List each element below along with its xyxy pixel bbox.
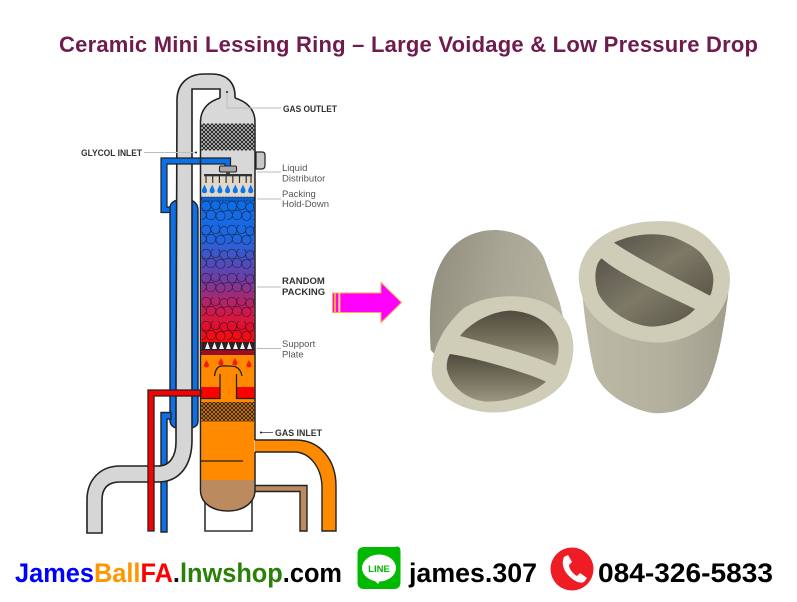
packing hold-down xyxy=(201,197,254,201)
small dots xyxy=(195,91,262,434)
brown drain pipe xyxy=(250,486,307,531)
footer: website: JamesBallFA.lnwshop.com xyxy=(15,558,342,588)
label: gas outlet: GAS OUTLET xyxy=(283,104,337,115)
icon: phone xyxy=(550,548,594,590)
label: liquid distributor: Liquid xyxy=(282,163,307,174)
label: support plate: Plate xyxy=(282,350,304,360)
column outline xyxy=(200,98,255,511)
footer: phone number: 084-326-5833 xyxy=(598,558,773,588)
side nozzle xyxy=(256,152,265,169)
stand under column xyxy=(205,500,252,531)
footer: line id: james.307 xyxy=(408,558,537,588)
label: random packing: PACKING xyxy=(282,287,325,298)
label: packing hold-down: Hold-Down xyxy=(282,199,329,210)
ring: left ceramic mini lessing ring xyxy=(430,230,573,412)
gray vapor pipe xyxy=(87,74,235,533)
top mesh pad xyxy=(201,124,254,150)
baffle xyxy=(201,460,243,462)
diagram: absorption column xyxy=(87,74,336,533)
blue lower pipe xyxy=(161,412,171,532)
red outlet pipe xyxy=(148,390,201,531)
liquid distributor xyxy=(204,166,252,183)
red liquid tray xyxy=(201,387,220,398)
orange gas inlet pipe xyxy=(254,440,336,531)
icon: LINE xyxy=(358,546,400,589)
icon: LINE: LINE xyxy=(368,564,390,575)
label: random packing: RANDOM xyxy=(282,276,325,287)
blue reboiler vessel xyxy=(170,200,198,428)
red drops xyxy=(204,358,252,367)
label: gas inlet: GAS INLET xyxy=(275,428,322,439)
chimney hat xyxy=(214,366,242,376)
lower section tan xyxy=(201,176,254,197)
column shell fill xyxy=(200,98,255,511)
arrow xyxy=(332,282,402,322)
label leader lines xyxy=(144,91,281,432)
label: support plate: Support xyxy=(282,339,316,350)
brown sump xyxy=(201,480,254,510)
lower mesh xyxy=(201,402,254,422)
ring: right ceramic mini lessing ring xyxy=(579,221,730,413)
title: Ceramic Mini Lessing Ring – Large Voidage & Low Pressure Drop xyxy=(59,32,758,57)
label: glycol inlet: GLYCOL INLET xyxy=(81,148,142,159)
random packing bed xyxy=(201,197,254,343)
orange lower column xyxy=(201,355,254,480)
label: liquid distributor: Distributor xyxy=(282,174,325,184)
label: packing hold-down: Packing xyxy=(282,189,316,200)
blue glycol inlet pipe xyxy=(161,158,230,212)
blue drops xyxy=(202,184,253,193)
support plate xyxy=(201,342,254,350)
